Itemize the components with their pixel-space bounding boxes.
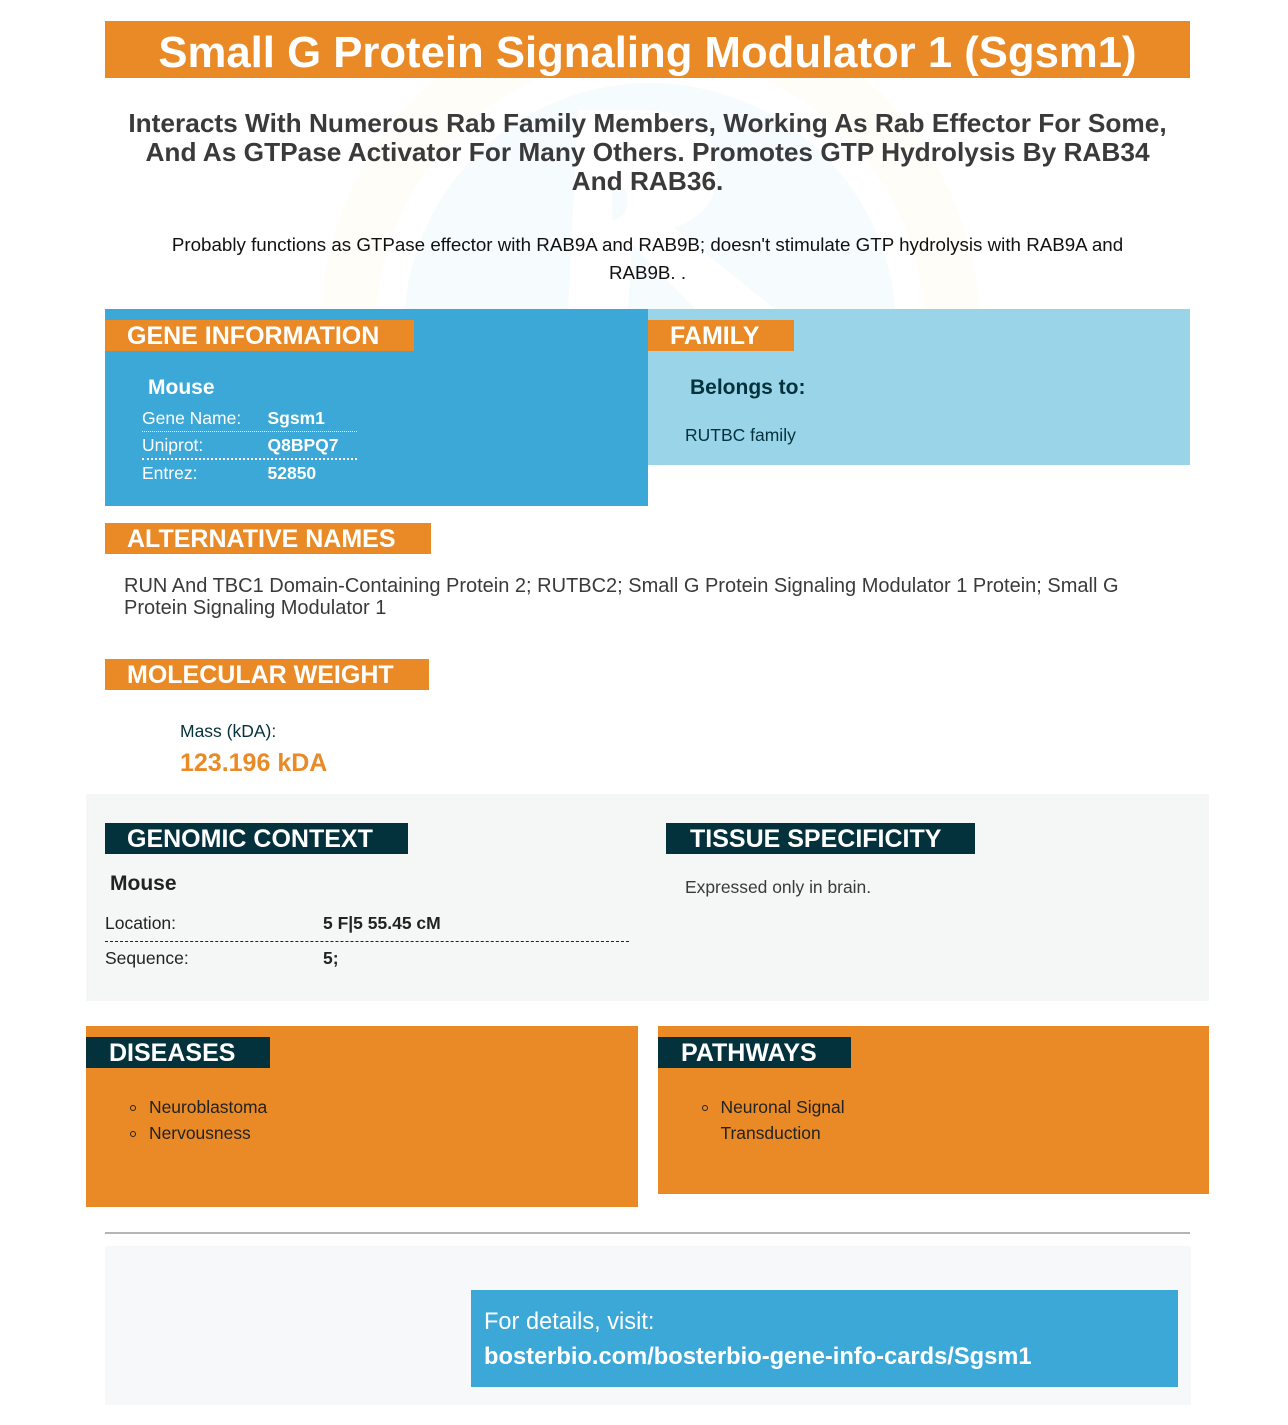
panel: family [648, 309, 1190, 465]
footer band [105, 1246, 1191, 1405]
heading: gene information: GENE INFORMATION [127, 322, 379, 350]
heading: diseases [86, 1037, 270, 1068]
genomic table: 5 F|5 55.45 cM [323, 913, 441, 933]
callout url: bosterbio.com/bosterbio-gene-info-cards/Sgsm1 [484, 1344, 1032, 1370]
species label: Mouse [148, 376, 215, 399]
panel: genomic band [86, 794, 1209, 1001]
heading: pathways: PATHWAYS [681, 1039, 817, 1067]
subtitle: And As GTPase Activator For Many Others. Promotes GTP Hydrolysis By RAB34 [145, 137, 1150, 167]
heading: family [648, 320, 794, 351]
gene details table: 52850 [268, 463, 316, 483]
tissue text: Expressed only in brain. [685, 877, 871, 897]
genomic table [105, 913, 629, 968]
heading: molecular weight: MOLECULAR WEIGHT [127, 661, 394, 689]
callout label: For details, visit: [484, 1309, 654, 1335]
heading: family: FAMILY [670, 322, 759, 350]
diseases list: Nervousness [149, 1123, 251, 1143]
alternative names text: RUN And TBC1 Domain-Containing Protein 2; RUTBC2; Small G Protein Signaling Modulator 1 Protein; Small G [124, 575, 1119, 597]
description: RAB9B. . [609, 262, 686, 283]
panel: diseases [86, 1026, 638, 1207]
alternative names text: Protein Signaling Modulator 1 [124, 597, 386, 619]
gene details table: Entrez: [142, 463, 197, 483]
gene details table: Uniprot: [142, 435, 203, 455]
subtitle [128, 108, 1167, 196]
pathways list [702, 1097, 845, 1143]
subtitle: Interacts With Numerous Rab Family Members, Working As Rab Effector For Some, [128, 108, 1167, 138]
heading: tissue specificity: TISSUE SPECIFICITY [690, 825, 941, 853]
species label: Mouse [110, 872, 177, 895]
heading: genomic context: GENOMIC CONTEXT [127, 825, 373, 853]
diseases list [130, 1097, 268, 1143]
belongs to label: Belongs to: [690, 376, 806, 399]
gene details table: Sgsm1 [268, 408, 325, 428]
genomic table: Sequence: [105, 948, 189, 968]
diseases list: Neuroblastoma [149, 1097, 267, 1117]
panel: gene information [105, 309, 648, 506]
heading: pathways [658, 1037, 851, 1068]
watermark logo [405, 83, 895, 309]
subtitle: And RAB36. [572, 166, 723, 196]
pathways list: Neuronal Signal [720, 1097, 845, 1117]
gene details table: Q8BPQ7 [268, 435, 338, 455]
divider [105, 1232, 1190, 1234]
gene details table: Gene Name: [142, 408, 241, 428]
callout: details link [471, 1290, 1178, 1387]
heading: diseases: DISEASES [109, 1039, 235, 1067]
genomic table: 5; [323, 948, 339, 968]
family value: RUTBC family [685, 425, 796, 445]
gene details table [142, 408, 357, 483]
panel: pathways [658, 1026, 1209, 1194]
description: Probably functions as GTPase effector with RAB9A and RAB9B; doesn't stimulate GTP hydrolysis with RAB9A and [172, 234, 1123, 255]
mass label: Mass (kDA): [180, 721, 276, 741]
description [172, 234, 1123, 283]
heading: alternative names: ALTERNATIVE NAMES [127, 525, 396, 553]
alternative names text [124, 575, 1119, 619]
mass value: 123.196 kDA [180, 749, 327, 777]
pathways list: Transduction [720, 1123, 821, 1143]
title: Small G Protein Signaling Modulator 1 (Sgsm1) [158, 28, 1137, 77]
genomic table: Location: [105, 913, 176, 933]
